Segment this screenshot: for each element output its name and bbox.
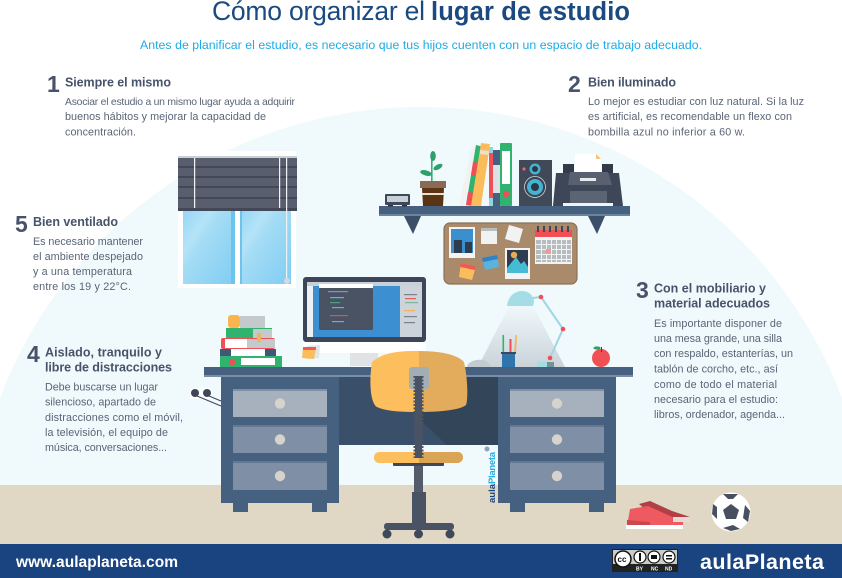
section 1: siempre el mismo: [47, 71, 296, 138]
section 5: ventilado: el ambiente despejado: [33, 251, 143, 263]
section 1: siempre el mismo: Siempre el mismo: [65, 76, 171, 90]
soccer ball: [712, 492, 750, 532]
section 3: mobiliario: [636, 277, 793, 421]
section 4: aislado: Debe buscarse un lugar: [45, 382, 158, 394]
sticky note: [302, 345, 320, 359]
section 4: aislado: música, conversaciones...: [45, 442, 167, 454]
creative commons badge: ND: [665, 566, 673, 572]
footer bar: [0, 544, 842, 578]
section 4: aislado: distracciones como el móvil,: [45, 412, 183, 424]
section 2: bien iluminado: [568, 71, 804, 138]
section 3: mobiliario: una mesa grande, una silla: [654, 333, 782, 345]
shelf: [379, 206, 630, 234]
section 2: bien iluminado: Lo mejor es estudiar con luz natural. Si la luz: [588, 96, 804, 108]
creative commons badge: NC: [651, 566, 659, 572]
right drawers: [510, 389, 604, 490]
vertical brand mark: aula: [487, 483, 498, 503]
section 4: aislado: [27, 341, 183, 454]
sneakers: [626, 501, 690, 529]
website: www.aulaplaneta.com: [15, 554, 178, 571]
mouse: [467, 360, 491, 367]
brand name: aulaPlaneta: [700, 550, 825, 574]
creative commons badge: [612, 549, 678, 572]
subtitle: Antes de planificar el estudio, es necesario que tus hijos cuenten con un espacio de trabajo adecuado.: [140, 38, 702, 52]
section 2: bien iluminado: bombilla azul no inferior a 60 w.: [588, 126, 745, 138]
plant: [420, 151, 446, 206]
section 4: aislado: 4: [27, 341, 40, 367]
vertical brand mark: Planeta: [487, 451, 498, 484]
section 4: aislado: Aislado, tranquilo y: [45, 346, 162, 360]
section 4: aislado: la televisión, el equipo de: [45, 427, 168, 439]
section 5: ventilado: entre los 19 y 22°C.: [33, 281, 131, 293]
section 3: mobiliario: Es importante disponer de: [654, 318, 782, 330]
vertical brand mark: [484, 446, 498, 503]
background arc: [0, 107, 842, 485]
section 4: aislado: libre de distracciones: [45, 361, 172, 375]
desk: [204, 367, 633, 512]
speaker: [519, 160, 552, 206]
chair: [370, 351, 467, 538]
lamp: [478, 291, 565, 368]
section 3: mobiliario: 3: [636, 277, 649, 303]
section 1: siempre el mismo: concentración.: [65, 126, 136, 138]
creative commons badge: cc: [618, 555, 627, 564]
section 3: mobiliario: como de todo el material: [654, 379, 777, 391]
window with blinds: [178, 151, 297, 288]
section 1: siempre el mismo: Asociar el estudio a un mismo lugar ayuda a adquirir: [65, 97, 296, 108]
corkboard: [444, 223, 577, 284]
section 2: bien iluminado: 2: [568, 71, 581, 97]
section 1: siempre el mismo: buenos hábitos y mejorar la capacidad de: [65, 111, 266, 123]
section 3: mobiliario: necesario para el estudio:: [654, 394, 778, 406]
pen cup: [501, 335, 517, 367]
section 5: ventilado: Bien ventilado: [33, 215, 118, 229]
section 3: mobiliario: material adecuados: [654, 297, 770, 311]
apple: [592, 346, 610, 367]
monitor: [303, 277, 426, 366]
left drawers: [233, 389, 327, 490]
section 1: siempre el mismo: 1: [47, 71, 60, 97]
section 5: ventilado: 5: [15, 211, 28, 237]
alarm clock: [385, 194, 410, 206]
section 4: aislado: silencioso, apartado de: [45, 396, 156, 408]
stack of books: [220, 315, 282, 367]
section 3: mobiliario: con respaldo, estanterías, un: [654, 348, 793, 360]
section 5: ventilado: [15, 211, 143, 293]
books and binders on shelf: [459, 143, 512, 206]
section 3: mobiliario: libros, ordenador, agenda...: [654, 409, 785, 421]
section 2: bien iluminado: es artificial, es recomendable un flexo con: [588, 111, 792, 123]
section 3: mobiliario: Con el mobiliario y: [654, 282, 766, 296]
section 5: ventilado: y a una temperatura: [33, 266, 132, 278]
printer: [553, 154, 623, 206]
section 5: ventilado: Es necesario mantener: [33, 236, 143, 248]
section 3: mobiliario: tablón de corcho, etc., así: [654, 364, 778, 376]
floor: [0, 485, 842, 544]
section 2: bien iluminado: Bien iluminado: [588, 76, 676, 90]
headphones plug: [190, 388, 221, 406]
main title: [212, 0, 630, 26]
creative commons badge: BY: [636, 566, 644, 572]
